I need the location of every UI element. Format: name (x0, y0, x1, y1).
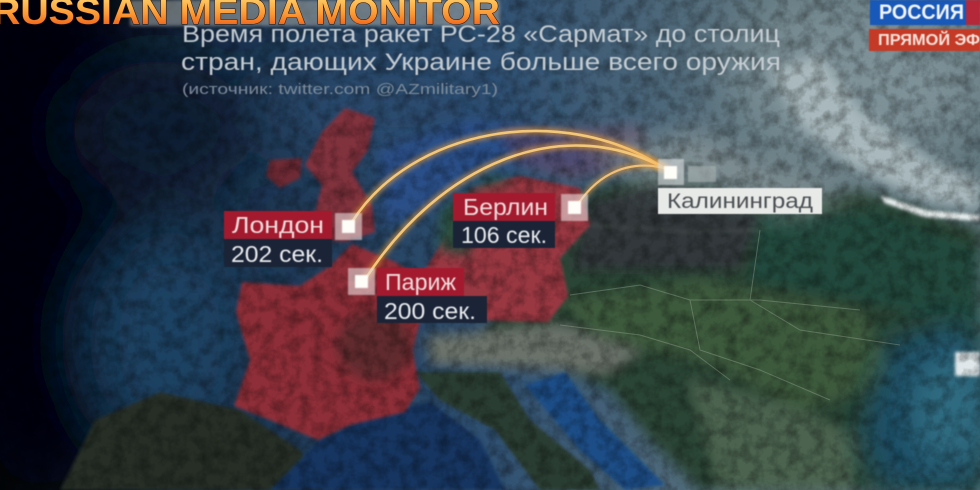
label: Paris (377, 268, 487, 324)
label: Paris: 200 сек. (384, 298, 476, 324)
label: Berlin: Берлин (463, 194, 548, 220)
North Sea and Baltic tint (378, 120, 655, 255)
cloud and snow cover in the north-east (600, 0, 980, 376)
channel logo: Rossiya: РОССИЯ (879, 1, 964, 24)
country: France (red overlay) (234, 244, 428, 440)
marker: Paris (348, 268, 375, 295)
missile arcs from Kaliningrad (352, 131, 664, 278)
arc: Berlin (578, 166, 664, 204)
heading: flight time of missiles: стран, дающих Украине больше всего оружия (181, 49, 781, 76)
heading: flight time of missiles: Время полета ракет РС-28 «Сармат» до столиц (182, 21, 780, 48)
label: London: Лондон (232, 212, 324, 238)
seas: Mediterranean, Adriatic and Black Sea (270, 320, 980, 490)
heading: flight time of missiles (181, 21, 781, 76)
landmass: Iberia, Italy and Balkans (60, 372, 600, 490)
arc: London (352, 131, 664, 222)
label: London (224, 211, 332, 267)
label: Berlin: 106 сек. (461, 222, 547, 248)
source line: (источник: twitter.com @AZmilitary1) (182, 82, 498, 98)
label: Kaliningrad: Калининград (667, 189, 813, 213)
label: Paris: Париж (385, 269, 457, 295)
top bar behind watermark (130, 0, 500, 26)
live badge (869, 29, 980, 51)
label: London: 202 сек. (231, 241, 323, 267)
marker: Berlin (561, 194, 588, 221)
marker: Kaliningrad (658, 159, 716, 185)
country: United Kingdom (red overlay) (282, 108, 375, 242)
live badge: ПРЯМОЙ ЭФ (878, 31, 980, 49)
landmass: central and eastern Europe (425, 170, 980, 490)
shading: dark Massif Central over France (337, 310, 413, 380)
country: Ireland (red overlay) (266, 158, 302, 188)
country borders (590, 205, 850, 232)
arc: Paris (366, 146, 664, 278)
country: Germany (red overlay) (425, 176, 590, 322)
label: Berlin (453, 193, 555, 248)
marker: London (335, 213, 362, 240)
